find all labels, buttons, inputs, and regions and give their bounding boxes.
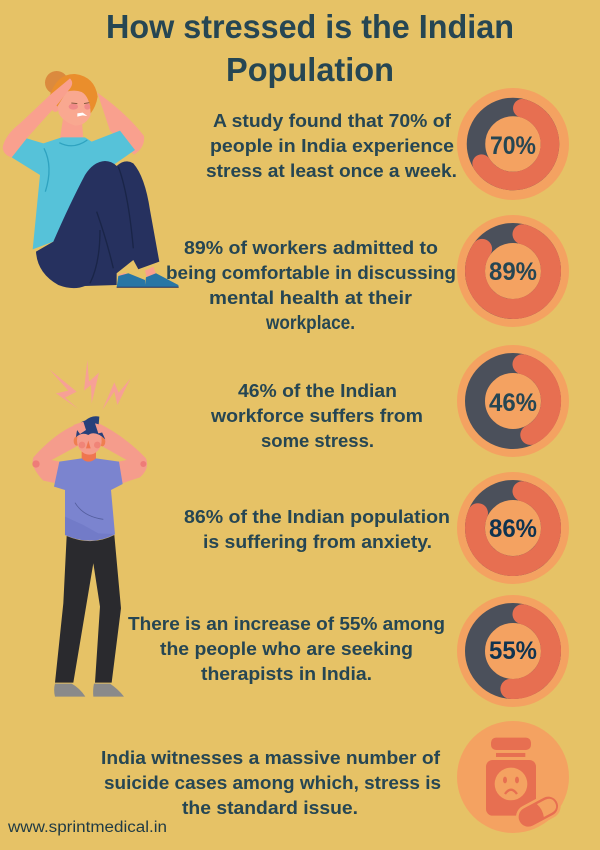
donut chart: 46%: 46%	[489, 389, 537, 417]
icon: stress lightning bolts	[49, 360, 131, 410]
text: 70% stress weekly: stress at least once a week.	[206, 160, 457, 181]
text: 70% stress weekly: people in India experience	[210, 135, 454, 156]
text: 46% of workforce: 46% of the Indian	[238, 380, 397, 401]
text: 89% of workers: being comfortable in discussing	[166, 262, 456, 283]
website credit: www.sprintmedical.in	[7, 819, 167, 836]
donut chart: 89%: 89%	[489, 258, 537, 286]
text: 89% of workers: 89% of workers admitted to	[184, 237, 438, 258]
text: 46% of workforce: workforce suffers from	[210, 405, 423, 426]
donut chart: 55%: 55%	[489, 637, 537, 665]
text: 86% anxiety: is suffering from anxiety.	[203, 531, 432, 552]
donut chart: 70%	[457, 88, 569, 200]
title: How stressed is the Indian	[106, 8, 514, 45]
title: Population	[226, 51, 394, 88]
title	[106, 8, 514, 88]
donut chart: 70%: 70%	[490, 132, 536, 160]
donut chart: 46%	[457, 345, 569, 457]
icon: sad medicine bottle and pill	[457, 721, 569, 833]
text: suicide cases: suicide cases among which, stress is	[104, 772, 441, 793]
illustration: stressed man holding head	[32, 360, 147, 697]
text: 86% anxiety: 86% of the Indian population	[184, 506, 450, 527]
text: 55% increase therapists: the people who are seeking	[160, 638, 413, 659]
illustration: stressed woman sitting	[3, 71, 179, 288]
text: 89% of workers	[166, 237, 456, 334]
text: suicide cases: the standard issue.	[182, 797, 358, 818]
text: 55% increase therapists: therapists in India.	[201, 663, 372, 684]
text: 89% of workers: mental health at their	[209, 287, 412, 308]
text: 55% increase therapists: There is an increase of 55% among	[128, 613, 445, 634]
donut chart: 86%: 86%	[489, 515, 537, 543]
text: 46% of workforce: some stress.	[261, 430, 374, 451]
donut chart: 86%	[457, 472, 569, 584]
text: suicide cases: India witnesses a massive number of	[101, 747, 441, 768]
text: 46% of workforce	[210, 380, 423, 451]
text: 70% stress weekly: A study found that 70% of	[213, 110, 452, 131]
text: 70% stress weekly	[206, 110, 457, 181]
donut chart: 89%	[457, 215, 569, 327]
donut chart: 55%	[457, 595, 569, 707]
text: 86% anxiety	[184, 506, 450, 552]
text: suicide cases	[101, 747, 441, 818]
text: 89% of workers: workplace.	[265, 312, 355, 334]
text: 55% increase therapists	[128, 613, 445, 684]
